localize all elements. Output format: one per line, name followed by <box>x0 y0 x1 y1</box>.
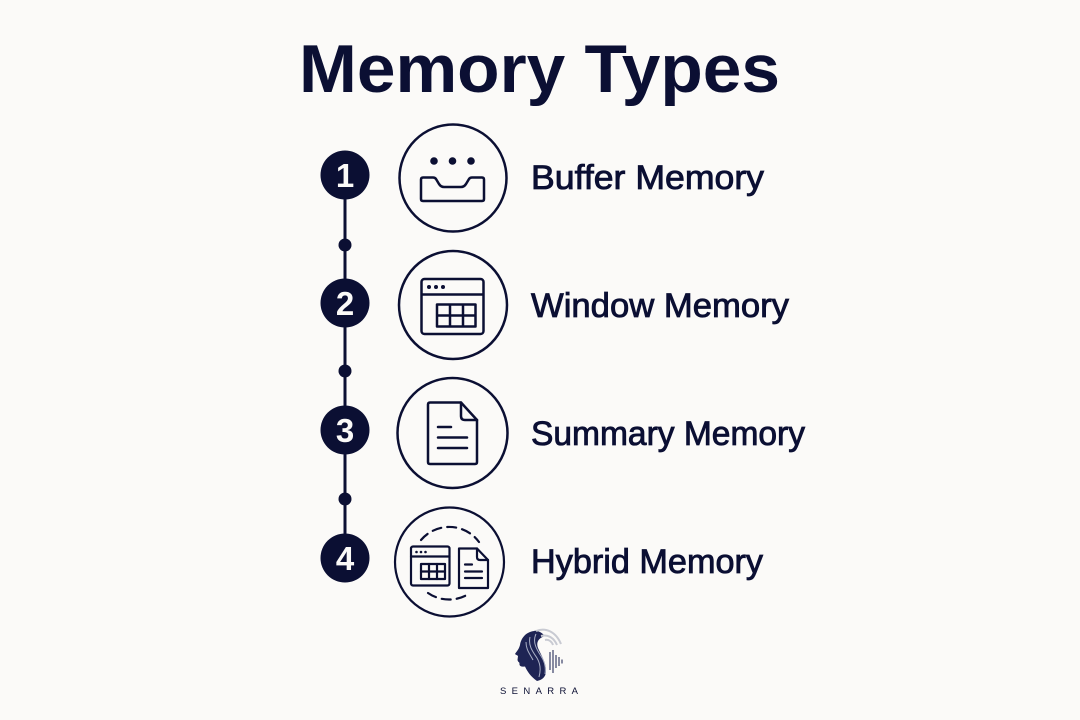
title: Memory Types <box>299 31 780 107</box>
icon: hybrid window and document <box>395 508 504 616</box>
label: Buffer Memory: Buffer Memory <box>531 159 764 197</box>
logo hair strands <box>526 634 545 677</box>
label: Summary Memory: Summary Memory <box>531 415 805 453</box>
number 4 <box>320 534 370 582</box>
number 1: 1 <box>336 157 354 194</box>
icon: document <box>398 378 508 488</box>
number 4: 4 <box>336 540 355 577</box>
number 3: 3 <box>336 412 354 449</box>
number 1 <box>320 150 370 200</box>
number 2: 2 <box>336 285 354 322</box>
icon: window with table <box>399 251 507 359</box>
number 2 <box>320 278 370 328</box>
logo wordmark: SENARRA <box>500 686 579 697</box>
logo signal arcs <box>536 630 561 645</box>
logo sound wave <box>550 650 562 673</box>
label: Window Memory: Window Memory <box>531 287 789 325</box>
label: Hybrid Memory: Hybrid Memory <box>531 543 763 581</box>
timeline <box>320 150 370 582</box>
logo: Senarra <box>500 630 579 697</box>
number 3 <box>320 406 370 454</box>
icon: buffer tray <box>400 124 506 232</box>
logo head silhouette <box>515 631 546 681</box>
